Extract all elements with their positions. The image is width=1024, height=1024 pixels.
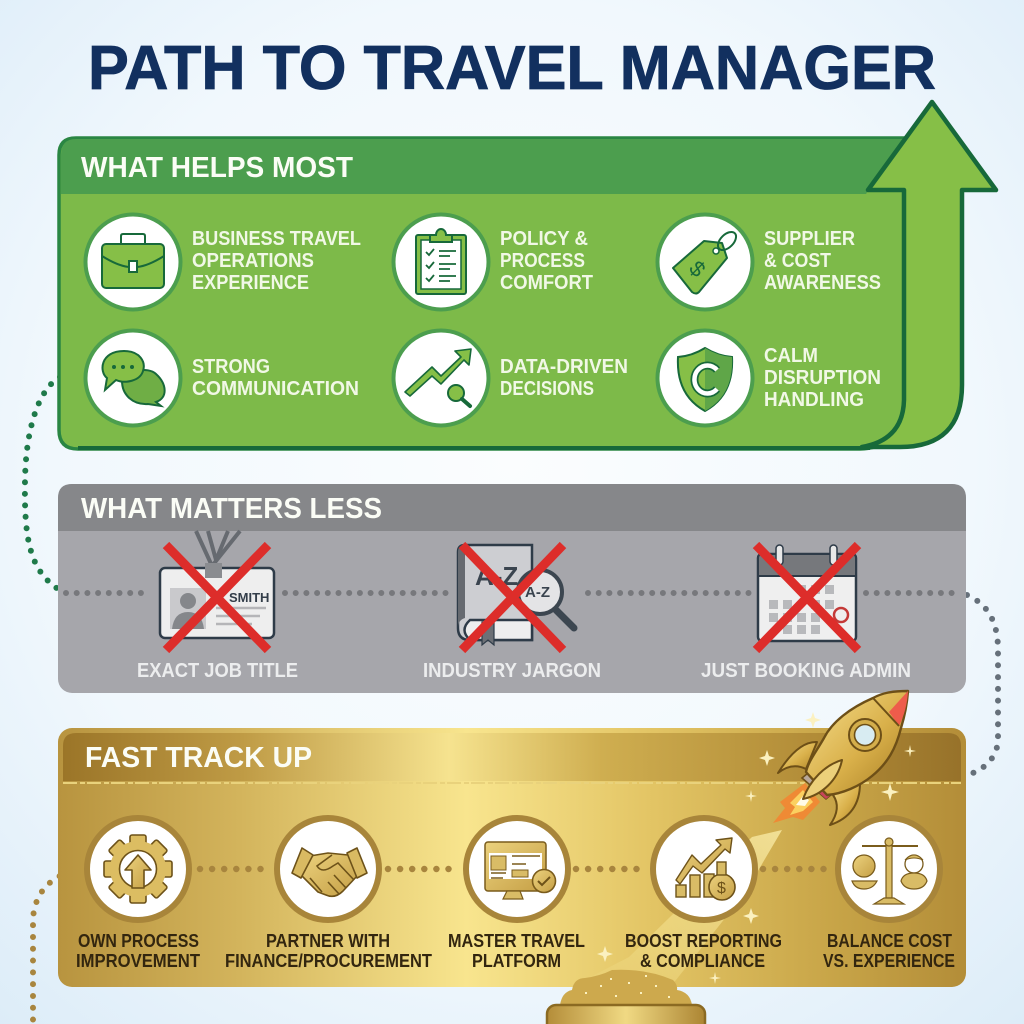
item: boost reporting and compliance xyxy=(625,818,782,971)
light beam behind the rocket xyxy=(575,830,782,985)
grey panel header band xyxy=(58,484,966,531)
item: business travel operations experience xyxy=(86,214,361,310)
rocket nozzle xyxy=(802,773,832,799)
label: BOOST REPORTING xyxy=(625,930,782,951)
label xyxy=(225,930,433,971)
icon: gear with up arrow xyxy=(87,818,189,920)
icon: speech bubbles xyxy=(86,330,180,426)
green panel body xyxy=(59,138,905,449)
label: HANDLING xyxy=(764,389,864,411)
item: just booking admin xyxy=(701,545,911,682)
label xyxy=(625,930,782,971)
item: supplier and cost awareness xyxy=(658,214,881,310)
label xyxy=(500,356,628,400)
connector: grey dotted path xyxy=(967,595,998,775)
connector: gold dotted path xyxy=(33,869,82,1020)
panel: what helps most xyxy=(59,102,996,449)
label: DISRUPTION xyxy=(764,367,881,389)
label: COMFORT xyxy=(500,272,593,294)
grey panel body xyxy=(58,484,966,693)
label: POLICY & xyxy=(500,228,588,250)
label: CALM xyxy=(764,345,818,367)
item: strong communication xyxy=(86,330,359,426)
item: industry jargon xyxy=(423,545,601,682)
rocket xyxy=(773,691,908,825)
icon: crossed-out book and magnifier xyxy=(458,545,574,650)
icon: computer screen with check xyxy=(466,818,568,920)
label: & COMPLIANCE xyxy=(640,950,765,971)
label: FINANCE/PROCUREMENT xyxy=(225,950,433,971)
exhaust flame xyxy=(773,783,820,823)
gold panel header band xyxy=(63,733,961,781)
label: SUPPLIER xyxy=(764,228,855,250)
icon: crossed-out book and magnifier: A-Z xyxy=(525,584,550,601)
label xyxy=(823,930,955,971)
label: PLATFORM xyxy=(472,950,561,971)
rocket centre fin xyxy=(803,760,842,799)
panel bottom edge xyxy=(78,446,870,450)
heading: what matters less: WHAT MATTERS LESS xyxy=(81,493,382,525)
item: exact job title xyxy=(137,531,298,682)
label: STRONG xyxy=(192,356,270,378)
launch pedestal with gold dust xyxy=(547,970,705,1024)
label xyxy=(192,228,361,294)
item: partner with finance/procurement xyxy=(225,818,433,971)
label: BALANCE COST xyxy=(827,930,953,951)
rocket nose cone xyxy=(889,691,908,726)
label: VS. EXPERIENCE xyxy=(823,950,955,971)
header lower edge xyxy=(63,782,961,784)
item: policy and process comfort xyxy=(394,214,593,310)
label xyxy=(764,345,881,411)
icon: crossed-out ID badge: SMITH xyxy=(229,590,269,605)
label xyxy=(764,228,881,294)
dotted row xyxy=(66,590,962,596)
label: DATA-DRIVEN xyxy=(500,356,628,378)
sparkles xyxy=(597,712,916,984)
item: data-driven decisions xyxy=(394,330,628,426)
label: AWARENESS xyxy=(764,272,881,294)
icon: crossed-out calendar xyxy=(756,545,858,650)
icon: rising arrow and magnifier xyxy=(394,330,488,426)
label: EXPERIENCE xyxy=(192,272,309,294)
icon: price tag xyxy=(658,214,752,310)
heading: fast track up: FAST TRACK UP xyxy=(85,742,312,774)
label: COMMUNICATION xyxy=(192,378,359,400)
item: own process improvement xyxy=(76,818,201,971)
label: PROCESS xyxy=(500,250,585,272)
rocket fins xyxy=(778,742,817,773)
dotted row xyxy=(200,866,830,872)
label: PARTNER WITH xyxy=(266,930,390,951)
item: calm disruption handling xyxy=(658,330,881,426)
label: BUSINESS TRAVEL xyxy=(192,228,361,250)
label xyxy=(448,930,585,971)
label: DECISIONS xyxy=(500,378,594,400)
upward arrow xyxy=(862,102,996,447)
icon: handshake xyxy=(277,818,379,920)
label xyxy=(500,228,593,294)
icon: balance scales xyxy=(838,818,940,920)
label: IMPROVEMENT xyxy=(76,950,201,971)
gold panel body xyxy=(58,728,966,987)
icon: shield xyxy=(658,330,752,426)
icon: briefcase xyxy=(86,214,180,310)
label: & COST xyxy=(764,250,831,272)
title: PATH TO TRAVEL MANAGER xyxy=(88,34,936,103)
icon: price tag: $ xyxy=(684,256,711,282)
label xyxy=(192,356,359,400)
green panel header band xyxy=(61,139,903,194)
icon: crossed-out ID badge xyxy=(160,531,274,650)
icon: rising chart with coin xyxy=(653,818,755,920)
label: INDUSTRY JARGON xyxy=(423,660,601,682)
item: balance cost vs. experience xyxy=(823,818,955,971)
panel: fast track up xyxy=(58,728,966,987)
label: OWN PROCESS xyxy=(78,930,199,951)
heading: what helps most: WHAT HELPS MOST xyxy=(81,152,353,184)
icon: rising chart with coin: $ xyxy=(717,880,726,897)
icon: crossed-out book and magnifier: A-Z xyxy=(475,561,518,591)
item: master travel platform xyxy=(448,818,585,971)
label: EXACT JOB TITLE xyxy=(137,660,298,682)
label: JUST BOOKING ADMIN xyxy=(701,660,911,682)
label: MASTER TRAVEL xyxy=(448,930,585,951)
label xyxy=(76,930,201,971)
connector: green dotted path xyxy=(25,377,60,589)
icon: clipboard xyxy=(394,214,488,310)
rocket window xyxy=(849,719,881,751)
panel: what matters less xyxy=(58,484,966,693)
rocket body xyxy=(806,691,908,795)
label: OPERATIONS xyxy=(192,250,314,272)
